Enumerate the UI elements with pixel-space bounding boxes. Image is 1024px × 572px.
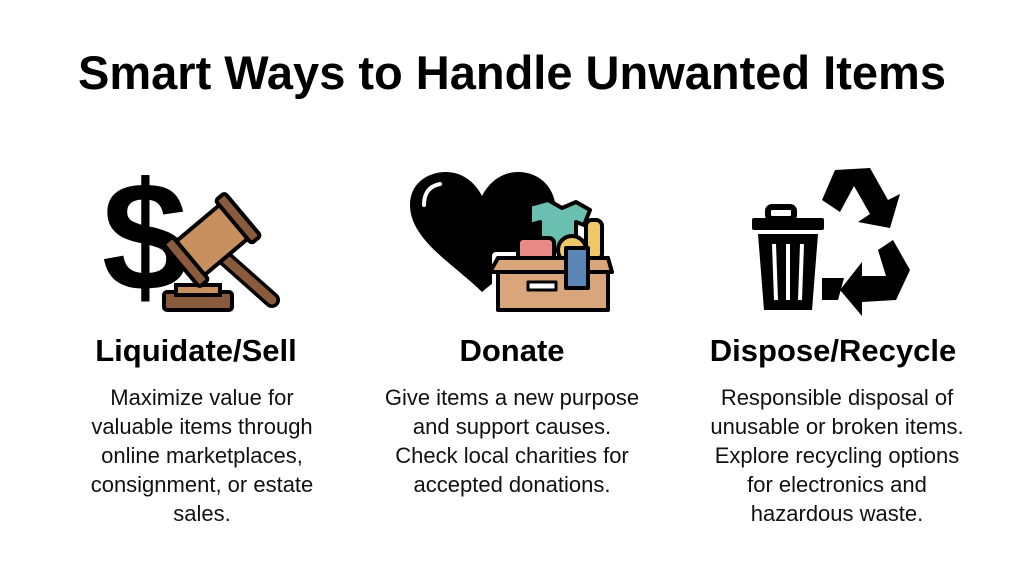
text: donate [385,385,639,497]
icon: trash and recycle [752,168,910,316]
text: sell: Maximize value for [110,385,294,410]
text: donate: Check local charities for [395,443,629,468]
text: dispose: Responsible disposal of [721,385,953,410]
text: sell: consignment, or estate [91,472,313,497]
icon: dollar gavel: $ [102,150,188,323]
text: sell: sales. [173,501,231,526]
icon: dollar gavel [102,150,272,323]
text: donate: accepted donations. [414,472,610,497]
text: sell: valuable items through [91,414,313,439]
text: dispose: unusable or broken items. [710,414,964,439]
text: dispose: for electronics and [747,472,927,497]
text: donate: and support causes. [413,414,611,439]
icon: heart and donation box [410,172,612,312]
text: dispose [710,385,964,526]
heading: Dispose/Recycle: Dispose/Recycle [710,333,956,368]
heading: Liquidate/Sell: Liquidate/Sell [95,333,297,368]
text: dispose: Explore recycling options [715,443,959,468]
text: sell [91,385,313,526]
text: donate: Give items a new purpose [385,385,639,410]
text: dispose: hazardous waste. [751,501,923,526]
title: Smart Ways to Handle Unwanted Items [78,46,946,99]
heading: Donate: Donate [459,333,565,368]
text: sell: online marketplaces, [101,443,303,468]
